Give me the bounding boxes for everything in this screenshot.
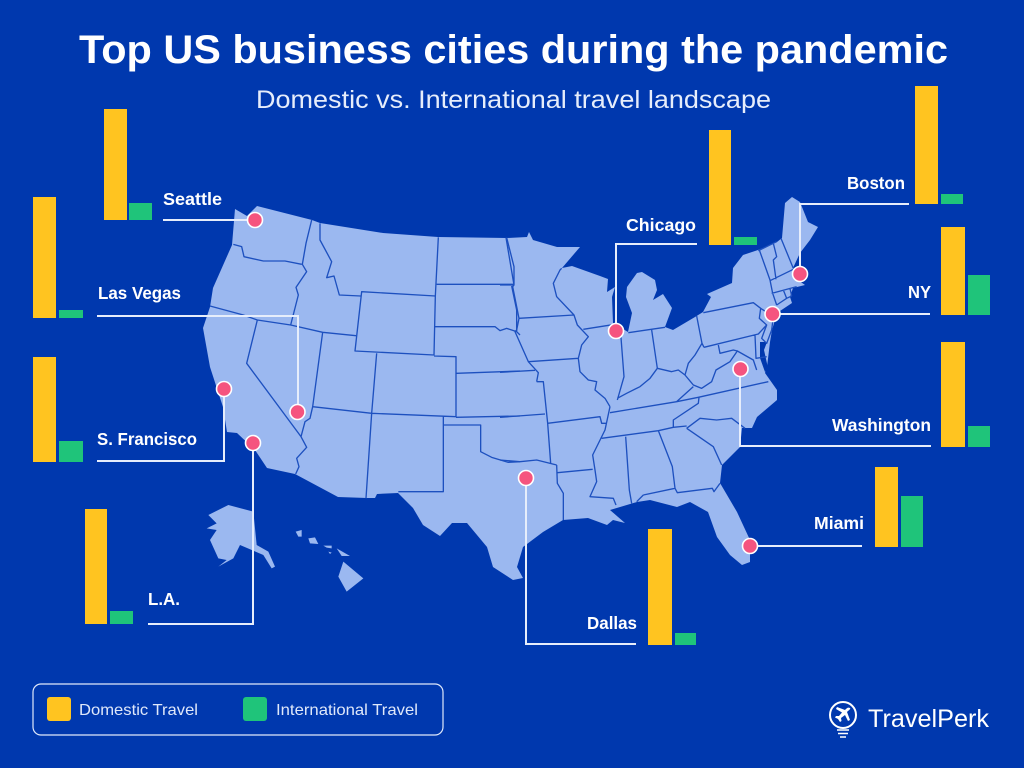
callout: Boston: [792, 86, 963, 282]
callout: Chicago: Chicago: [626, 215, 696, 235]
callout: S. Francisco: S. Francisco: [97, 429, 197, 449]
callout: Dallas: Dallas: [587, 613, 637, 633]
subtitle: Domestic vs. International travel landscape: [256, 86, 771, 114]
logo: TravelPerk: [830, 702, 990, 737]
callout: Boston: Boston: [847, 173, 905, 193]
title: Top US business cities during the pandemic: [79, 28, 948, 72]
callout: Washington: Washington: [832, 415, 931, 435]
callout: Washington: [733, 342, 990, 447]
callout: NY: [765, 227, 990, 322]
callout: L.A.: L.A.: [148, 589, 180, 609]
legend: Domestic Travel: [79, 702, 198, 719]
callout: Miami: Miami: [814, 513, 864, 533]
callout: Seattle: [104, 109, 262, 228]
callout: S. Francisco: [33, 357, 232, 462]
legend: [33, 684, 443, 735]
alaska and hawaii: [207, 505, 363, 592]
callout: Chicago: [608, 130, 757, 338]
callout: L.A.: [85, 436, 260, 624]
US map: [203, 197, 818, 592]
callout: Miami: [742, 467, 923, 554]
legend: International Travel: [276, 702, 418, 719]
callout: Dallas: [518, 470, 696, 645]
callout: Las Vegas: [33, 197, 305, 420]
logo: TravelPerk: TravelPerk: [868, 705, 990, 733]
callout: NY: NY: [908, 282, 931, 302]
callout: Las Vegas: Las Vegas: [98, 283, 181, 303]
callout: Seattle: Seattle: [163, 189, 222, 209]
